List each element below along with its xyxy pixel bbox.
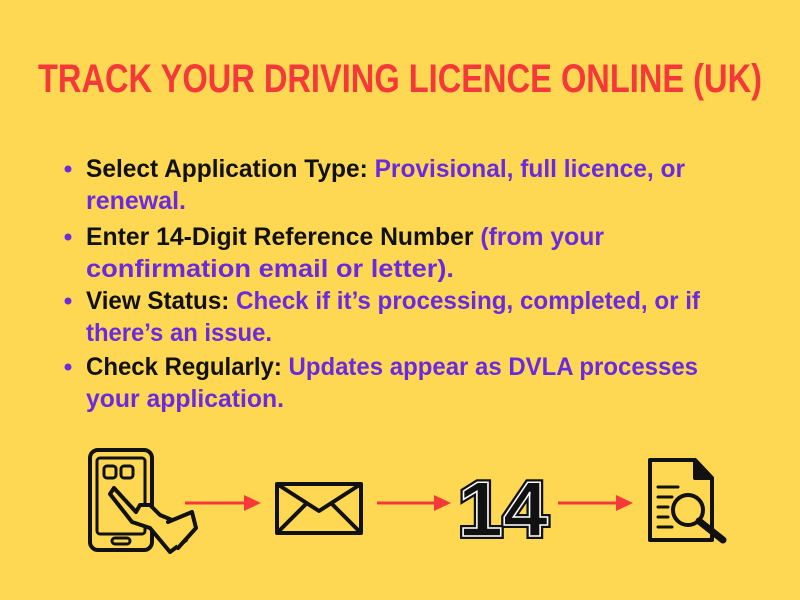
- bullet 2: [64, 223, 604, 283]
- arrow 1: [185, 495, 261, 511]
- arrow 3: [558, 495, 633, 511]
- bullet 4: your application.: [86, 385, 284, 413]
- bullet 2: confirmation email or letter).: [86, 255, 454, 283]
- icon: envelope: [277, 484, 361, 533]
- bullet 2: Enter 14-Digit Reference Number (from your: [86, 223, 604, 251]
- arrow 2: [377, 495, 451, 511]
- icon: number 14: 14: [458, 465, 548, 553]
- bullet 1: Select Application Type: Provisional, full licence, or: [86, 155, 685, 183]
- icon: phone with hand: [90, 450, 196, 552]
- bullet 3: there’s an issue.: [86, 319, 272, 347]
- bullet 1: renewal.: [86, 187, 186, 215]
- bullet 4: [64, 353, 698, 413]
- bullet 1: [64, 155, 685, 215]
- icon: document with magnifier: [650, 460, 723, 540]
- bullet 3: [64, 287, 701, 347]
- icon: number 14: 14: [458, 465, 548, 553]
- bullet 4: Check Regularly: Updates appear as DVLA processes: [86, 353, 698, 381]
- bullet list: [64, 155, 701, 413]
- bullet 3: View Status: Check if it’s processing, completed, or if: [86, 287, 701, 315]
